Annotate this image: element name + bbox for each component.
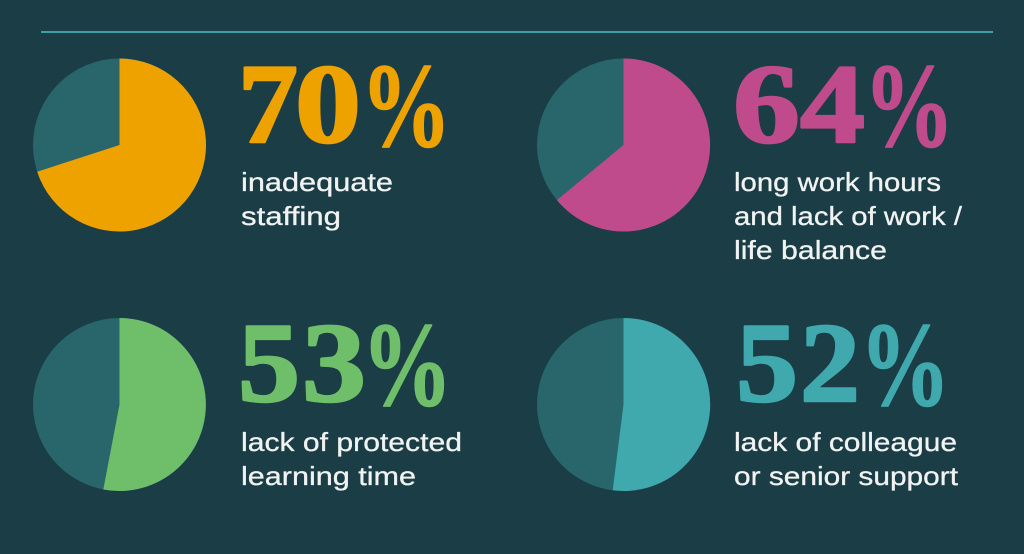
panel: 53% lack of protected learning time [33,298,462,491]
label: long work hours and lack of work / life balance: life balance [734,235,887,265]
label: inadequate staffing: staffing [241,201,341,231]
stat: 64%: % [864,39,954,172]
stat: 70%: 7 [238,42,298,167]
label: lack of protected learning time: lack of protected [241,427,462,457]
pie chart: 70% [33,58,206,232]
stat: 53% [238,298,452,431]
stat: 53%: % [362,298,452,431]
stat: 52%: % [860,298,950,431]
label: lack of colleague or senior support: lack of colleague [734,427,957,457]
panel: 52% lack of colleague or senior support [537,298,959,491]
label: lack of colleague or senior support: or senior support [734,461,959,491]
stat: 64%: 6 [733,42,800,167]
stat: 70%: % [361,39,451,172]
panel: 70% inadequate staffing [33,39,451,232]
stat: 52%: 5 [736,301,798,426]
label: lack of protected learning time: learning time [241,461,416,491]
stat: 70% [238,39,451,172]
stat: 64% [733,39,954,172]
stat: 52% [736,298,950,431]
panel: 64% long work hours [537,39,963,265]
stat: 64%: 4 [800,42,865,167]
stat: 52%: 2 [800,301,860,426]
pie chart: 53% [33,318,206,491]
label: long work hours and lack of work / life balance: long work hours [734,167,941,197]
label: long work hours and lack of work / life balance: and lack of work / [734,201,963,231]
pie chart: 52% [537,318,710,491]
stat: 53%: 3 [302,301,366,426]
stat: 70%: 0 [295,42,361,167]
pie chart: 64% [537,58,710,232]
stat: 53%: 5 [238,301,300,426]
label: inadequate staffing: inadequate [241,167,393,197]
